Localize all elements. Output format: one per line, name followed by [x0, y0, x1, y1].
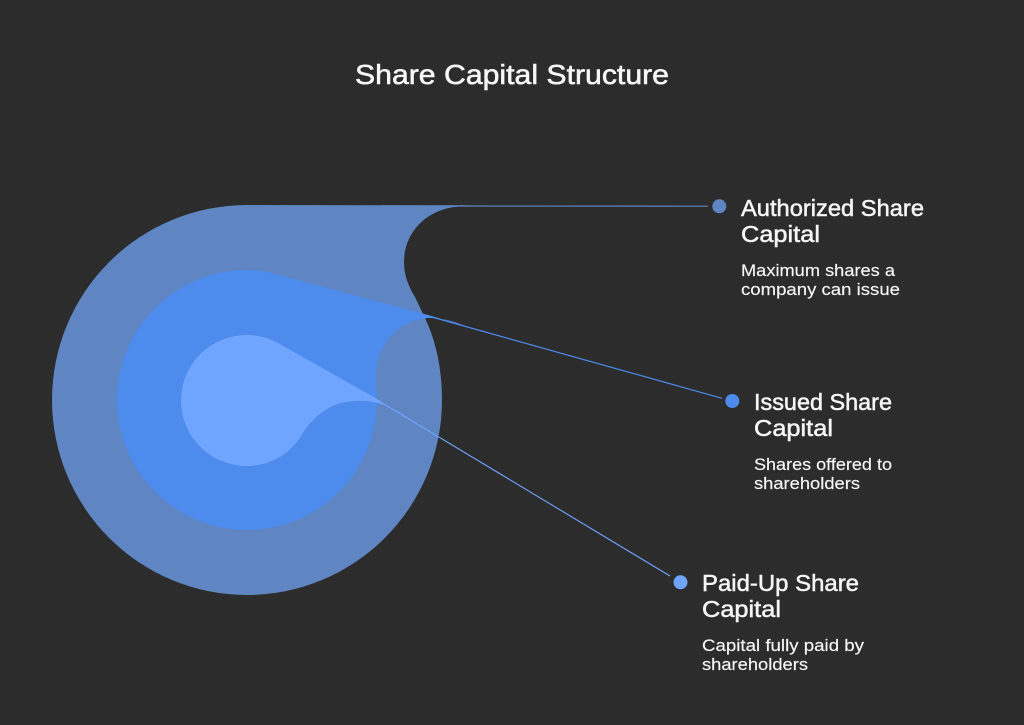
label: paid-up share capital: Paid-Up Share — [702, 570, 859, 596]
label: authorized share capital: Maximum shares a — [741, 262, 896, 280]
connector line: authorized — [460, 205, 708, 207]
marker: paid-up — [674, 575, 688, 589]
label: paid-up share capital — [702, 570, 865, 674]
connector line: paid-up — [375, 399, 670, 576]
marker: authorized — [712, 199, 726, 213]
label: authorized share capital: company can issue — [741, 281, 900, 299]
layer: issued share capital shape — [117, 270, 470, 530]
label: issued share capital: Shares offered to — [754, 456, 892, 474]
marker: issued — [725, 394, 739, 408]
label: authorized share capital: Capital — [741, 221, 820, 247]
label: paid-up share capital: shareholders — [702, 656, 808, 674]
label: issued share capital: Capital — [754, 415, 833, 441]
label: issued share capital: shareholders — [754, 475, 860, 493]
connector line: issued — [430, 316, 722, 398]
nested funnel diagram — [52, 205, 500, 595]
layer: authorized share capital shape — [52, 205, 500, 595]
title: Share Capital Structure — [355, 59, 669, 90]
layer: paid-up share capital shape — [181, 335, 412, 466]
label: paid-up share capital: Capital — [702, 596, 781, 622]
label: issued share capital — [754, 389, 892, 493]
label: authorized share capital: Authorized Share — [741, 195, 924, 221]
label: authorized share capital — [741, 195, 924, 299]
label: paid-up share capital: Capital fully paid by — [702, 637, 865, 655]
label: issued share capital: Issued Share — [754, 389, 892, 415]
